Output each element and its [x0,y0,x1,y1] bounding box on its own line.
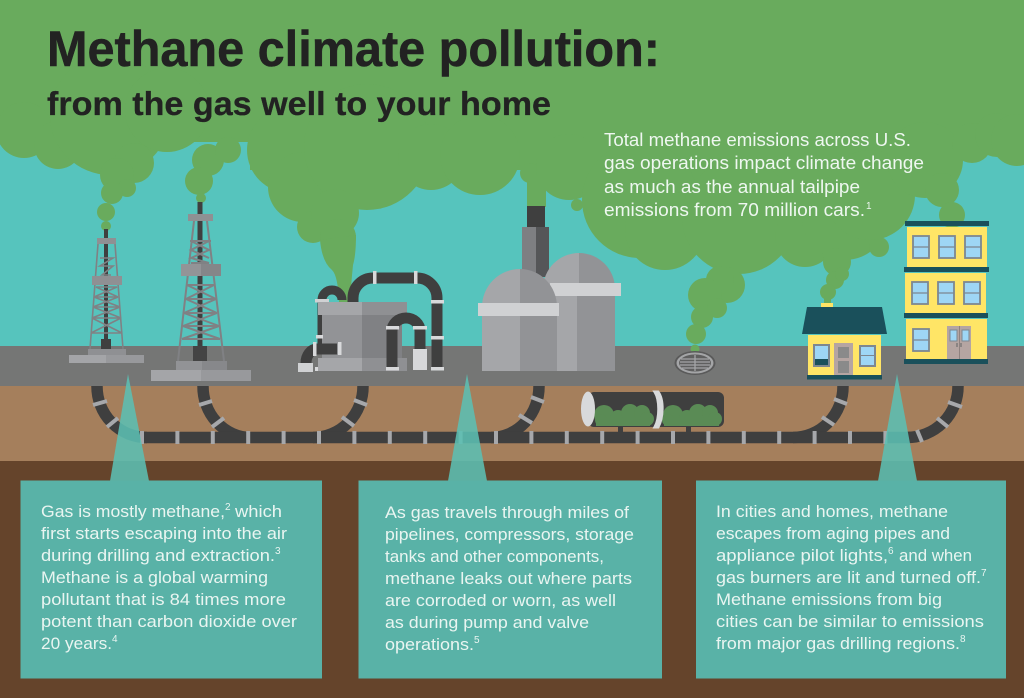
panel: gas wells and extraction: Gas is mostly methane, [41,502,225,521]
icon: storm drain [674,351,716,375]
callout pointer: pipelines [448,374,487,481]
panel: pipelines and components: 5 [474,635,480,646]
icon: house [802,303,887,380]
panel: cities and homes: from major gas drilling regions. [716,634,960,653]
callout: total methane emissions: 1 [866,201,872,212]
cutaway pipe with methane leak [581,392,724,433]
panel: gas wells and extraction: Methane is a global warming [41,568,268,587]
ground: brown soil [0,386,1024,461]
underground pipeline network [93,386,962,444]
callout pointer: wells [110,374,149,481]
ground: road surface [0,346,1024,386]
panel: pipelines and components: pipelines, compressors, storage [385,525,634,544]
panel: cities and homes: gas burners are lit and turned off. [716,568,981,587]
panel: gas wells and extraction: potent than carbon dioxide over [41,612,297,631]
panel: cities and homes: 7 [981,568,987,579]
panel: gas wells and extraction: 3 [275,546,281,557]
panel: gas wells and extraction: which [234,502,282,521]
panel: gas wells and extraction: 4 [112,634,118,645]
callout: total methane emissions: as much as the annual tailpipe [604,176,860,197]
title: Methane climate pollution: [47,21,660,77]
panel: gas wells and extraction [20,374,322,678]
panel: pipelines and components: as during pump and valve [385,613,589,632]
callout: total methane emissions: gas operations impact climate change [604,152,924,173]
panel: pipelines and components: operations. [385,635,474,654]
ground: deep soil [0,461,1024,698]
callout: total methane emissions: Total methane emissions across U.S. [604,129,911,150]
callout: total methane emissions [604,129,924,220]
panel: pipelines and components: tanks and other components, [385,547,604,566]
panel: pipelines and components: As gas travels through miles of [385,503,629,522]
icon: compressor station [298,271,444,372]
icon: gas storage tanks [478,206,621,371]
panel: cities and homes: and when [899,546,972,565]
panel: pipelines and components: methane leaks out where parts [385,569,632,588]
panel: cities and homes: escapes from aging pipes and [716,524,950,543]
panel: gas wells and extraction: 20 years. [41,634,112,653]
panel: pipelines and components [358,374,662,678]
panel: cities and homes: appliance pilot lights, [716,546,888,565]
methane cloud with smoke plumes [0,0,1024,354]
panel: cities and homes: Methane emissions from big [716,590,942,609]
callout pointer: homes [878,374,917,481]
panel: cities and homes: cities can be similar to emissions [716,612,984,631]
panel: gas wells and extraction: 2 [225,502,231,513]
panel: cities and homes [696,374,1006,678]
panel: gas wells and extraction: pollutant that is 84 times more [41,590,286,609]
panel: cities and homes: In cities and homes, methane [716,502,948,521]
panel: gas wells and extraction: during drilling and extraction. [41,546,275,565]
icon: apartment building [904,221,989,364]
callout: total methane emissions: emissions from 70 million cars. [604,199,865,220]
sky background [0,0,1024,346]
panel: cities and homes: 8 [960,634,966,645]
subtitle: from the gas well to your home [47,85,551,122]
panel: pipelines and components: are corroded or worn, as well [385,591,616,610]
icon: small drilling derrick [69,229,144,363]
panel: gas wells and extraction: first starts escaping into the air [41,524,287,543]
icon: large drilling derrick [151,202,251,381]
panel: cities and homes: 6 [888,546,894,557]
